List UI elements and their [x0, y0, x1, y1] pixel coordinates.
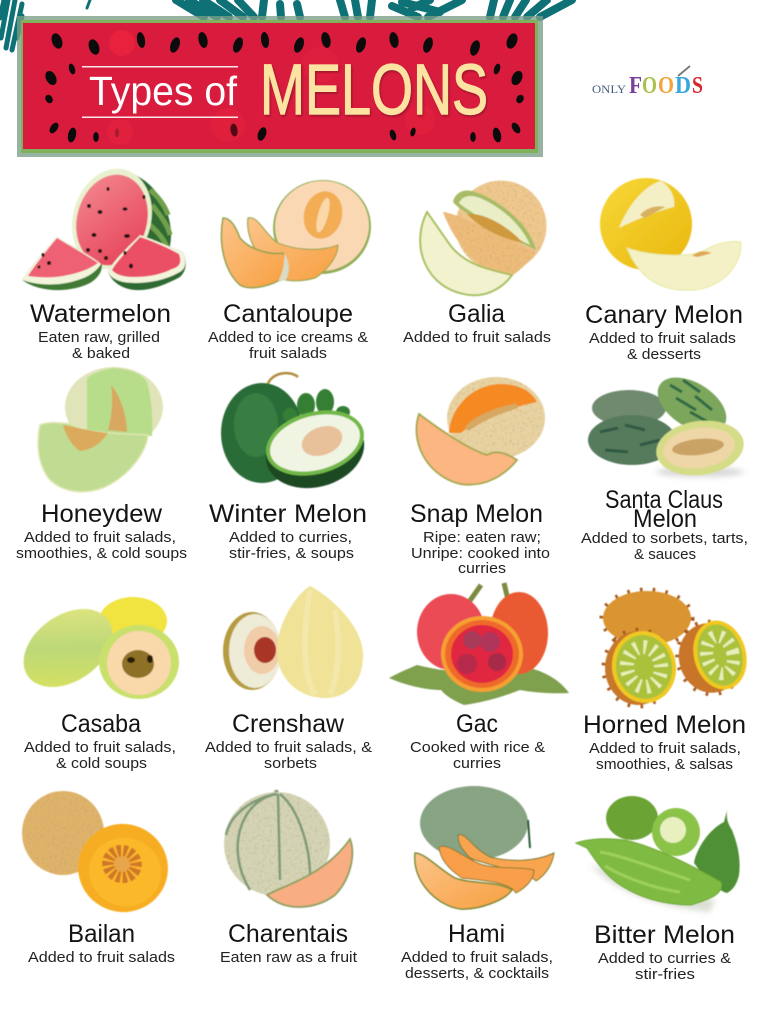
description: Cooked with rice &	[410, 739, 545, 756]
name: Melon	[633, 505, 697, 533]
title text: MELONS: MELONS	[260, 51, 488, 130]
description: stir-fries, & soups	[229, 545, 354, 562]
description	[589, 740, 741, 773]
watermelon seeds	[43, 31, 525, 143]
name: Honeydew	[41, 500, 163, 528]
card: Snap Melon	[410, 377, 550, 577]
description	[598, 950, 731, 983]
description: Added to fruit salads,	[24, 529, 176, 546]
name: Crenshaw	[232, 710, 345, 738]
title text: Types of: Types of	[89, 68, 238, 114]
card: Casaba	[9, 593, 179, 772]
title rules	[82, 66, 238, 118]
name: Casaba	[61, 710, 141, 738]
icon: bailan melon	[22, 791, 178, 922]
description: Unripe: cooked into	[411, 545, 550, 562]
name: Watermelon	[30, 300, 171, 328]
description: Eaten raw as a fruit	[220, 949, 358, 966]
logo: OnlyFoods: O	[642, 73, 657, 99]
description: & sauces	[634, 546, 696, 563]
name: Winter Melon	[209, 500, 367, 528]
name: Bitter Melon	[594, 921, 735, 949]
name: Snap Melon	[410, 500, 543, 528]
icon: santa claus melon	[588, 366, 747, 481]
logo: OnlyFoods: ONLY	[592, 84, 627, 96]
description	[589, 330, 736, 363]
card: Watermelon	[22, 160, 186, 362]
card: Santa Claus Melon	[581, 366, 748, 563]
name: Bailan	[68, 920, 135, 948]
description	[401, 949, 553, 982]
description: sorbets	[264, 755, 317, 772]
description: Added to ice creams &	[208, 329, 368, 346]
logo: OnlyFoods: S	[692, 73, 703, 99]
icon: charentais melon	[224, 790, 352, 907]
card: Gac	[389, 583, 569, 772]
name	[605, 486, 723, 533]
card: Canary Melon	[585, 178, 743, 363]
icon: gac fruit	[389, 583, 569, 705]
description: Added to fruit salads,	[589, 740, 741, 757]
icon: cantaloupe	[221, 172, 378, 288]
icon: canary melon	[600, 178, 741, 290]
description: Added to curries &	[598, 950, 731, 967]
icon: winter melon	[221, 373, 373, 499]
card: Cantaloupe	[208, 172, 378, 362]
card: Charentais	[220, 790, 358, 966]
description: Added to sorbets, tarts,	[581, 530, 748, 547]
card: Crenshaw	[205, 586, 372, 772]
name: Hami	[448, 920, 505, 948]
logo: OnlyFoods: F	[629, 73, 642, 99]
card: Winter Melon	[209, 373, 373, 562]
title banner	[17, 16, 543, 157]
name: Canary Melon	[585, 301, 743, 329]
logo: OnlyFoods	[592, 66, 703, 99]
description: & baked	[72, 345, 130, 362]
description: stir-fries	[635, 966, 695, 983]
description: Ripe: eaten raw;	[423, 529, 541, 546]
icon: casaba melon	[9, 593, 179, 703]
name: Santa Claus	[605, 486, 723, 514]
card: Horned Melon	[583, 591, 754, 773]
card: Bitter Melon	[576, 796, 740, 983]
card: Bailan	[22, 791, 178, 966]
palm leaves	[0, 0, 572, 50]
name: Cantaloupe	[223, 300, 353, 328]
name: Gac	[456, 710, 498, 738]
icon: snap melon	[416, 377, 545, 485]
icon: horned melon	[603, 591, 754, 708]
description: Added to fruit salads, &	[205, 739, 372, 756]
description: Added to fruit salads	[589, 330, 736, 347]
description: Added to fruit salads,	[401, 949, 553, 966]
icon: bitter melon	[576, 796, 740, 912]
description: smoothies, & salsas	[596, 756, 733, 773]
description	[410, 739, 545, 772]
card: Honeydew	[16, 367, 187, 562]
description	[24, 739, 176, 772]
icon: hami melon	[415, 786, 554, 909]
description: & cold soups	[56, 755, 147, 772]
description: Added to fruit salads,	[24, 739, 176, 756]
description	[208, 329, 368, 362]
logo: OnlyFoods: O	[658, 73, 674, 99]
name: Charentais	[228, 920, 348, 948]
description: Added to curries,	[229, 529, 352, 546]
description	[581, 530, 748, 563]
description	[16, 529, 187, 562]
icon: watermelon	[22, 160, 186, 290]
icon: honeydew melon	[38, 367, 163, 492]
description: smoothies, & cold soups	[16, 545, 187, 562]
name: Galia	[448, 300, 505, 328]
description: fruit salads	[249, 345, 327, 362]
description	[38, 329, 160, 362]
icon: crenshaw melon	[223, 586, 363, 698]
icon: galia melon	[420, 180, 546, 295]
description: Added to fruit salads	[28, 949, 175, 966]
description: curries	[458, 560, 506, 577]
description	[411, 529, 550, 577]
description	[229, 529, 354, 562]
description: Added to fruit salads	[403, 329, 551, 346]
logo: OnlyFoods: D	[675, 73, 691, 99]
name: Horned Melon	[583, 711, 746, 739]
card: Galia	[403, 180, 551, 346]
description: curries	[453, 755, 501, 772]
description: Eaten raw, grilled	[38, 329, 160, 346]
card: Hami	[401, 786, 554, 982]
description	[205, 739, 372, 772]
description: desserts, & cocktails	[405, 965, 549, 982]
description: & desserts	[627, 346, 701, 363]
